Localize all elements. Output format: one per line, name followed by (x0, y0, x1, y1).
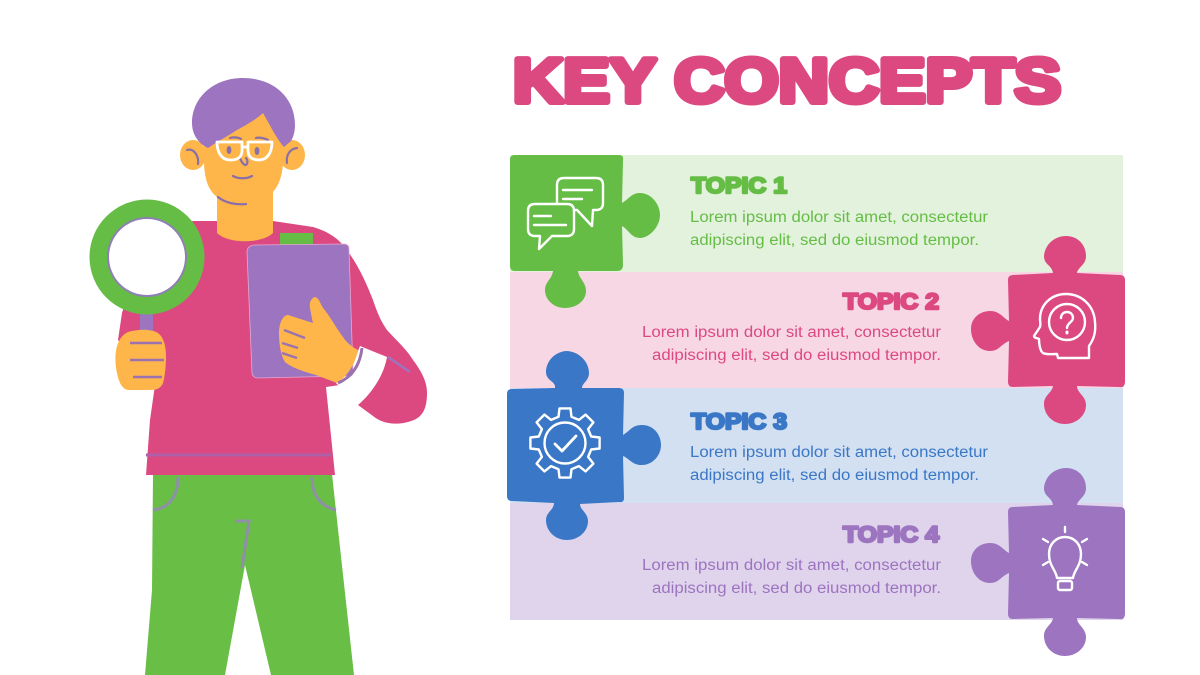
text: topic 3 body (690, 444, 988, 484)
illustration: man with magnifying glass and clipboard (90, 78, 427, 675)
sleeve cuff (336, 346, 387, 405)
text: topic 3 body: Lorem ipsum dolor sit amet, consectetur (690, 444, 988, 461)
icon: gear with check (530, 408, 600, 478)
icon: head with question mark (1034, 294, 1095, 358)
trousers (145, 474, 354, 675)
heading: topic 1: TOPIC 1 (691, 173, 787, 198)
heading: topic 2: TOPIC 2 (843, 289, 939, 314)
clipboard (247, 233, 353, 378)
icon: light bulb (1043, 527, 1087, 590)
heading: topic 3: TOPIC 3 (691, 409, 787, 434)
band: topic 3 background (510, 388, 1123, 503)
puzzle piece: green (510, 155, 660, 308)
text: topic 4 body: Lorem ipsum dolor sit amet, consectetur (642, 557, 941, 574)
band: topic 4 background (510, 503, 1123, 620)
text: topic 1 body (690, 209, 988, 249)
panel: topic 4 (642, 468, 1125, 656)
text: topic 1 body: adipiscing elit, sed do eiusmod tempor. (690, 232, 979, 249)
magnifying glass (90, 200, 204, 334)
band: topic 1 background (510, 155, 1123, 272)
text: topic 2 body: adipiscing elit, sed do eiusmod tempor. (652, 347, 941, 364)
panel: topic 1 (510, 155, 988, 308)
text: topic 3 body: adipiscing elit, sed do eiusmod tempor. (690, 467, 979, 484)
puzzle piece: pink (971, 236, 1125, 424)
glasses (217, 142, 272, 160)
panel: topic 2 (642, 236, 1125, 424)
band: topic 2 background (510, 272, 1123, 388)
title: KEY CONCEPTS (513, 47, 1061, 116)
puzzle piece: purple (971, 468, 1125, 656)
sweater (118, 221, 427, 475)
icon: chat bubbles (528, 178, 603, 249)
text: topic 4 body (642, 557, 941, 597)
panel: topic 3 (507, 351, 988, 540)
text: topic 2 body: Lorem ipsum dolor sit amet, consectetur (642, 324, 941, 341)
heading: topic 4: TOPIC 4 (843, 522, 940, 547)
left hand (115, 330, 166, 390)
right hand (279, 297, 362, 383)
ears (180, 140, 305, 170)
text: topic 4 body: adipiscing elit, sed do eiusmod tempor. (652, 580, 941, 597)
text: topic 1 body: Lorem ipsum dolor sit amet, consectetur (690, 209, 988, 226)
text: topic 2 body (642, 324, 941, 364)
puzzle piece: blue (507, 351, 661, 540)
head and neck (180, 78, 305, 241)
